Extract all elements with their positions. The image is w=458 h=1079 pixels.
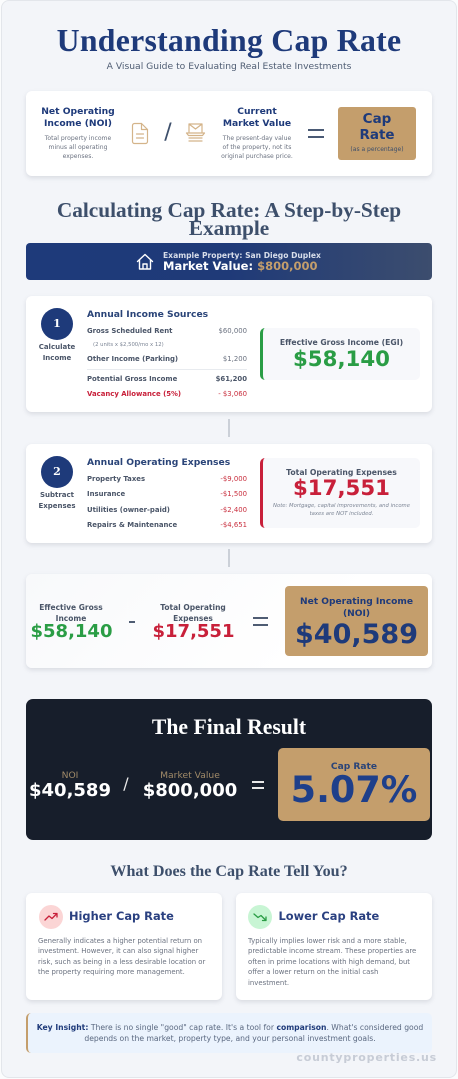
- section heading: step by step: Calculating Cap Rate: A Step-by-Step: [57, 198, 401, 222]
- expenses note: taxes are NOT included.: [310, 511, 373, 517]
- NOI result label: (NOI): [343, 609, 370, 619]
- row: utilities: -$2,400: [220, 506, 247, 514]
- market value heading: [223, 106, 291, 129]
- row: rent: Gross Scheduled Rent: [87, 327, 172, 335]
- expenses term value: $17,551: [152, 620, 234, 642]
- connector: [228, 549, 230, 567]
- row: potential gross: $61,200: [216, 375, 247, 383]
- lower heading: Lower Cap Rate: [278, 909, 379, 923]
- NOI result label: [300, 597, 413, 619]
- market value term: [221, 106, 293, 160]
- step 1 badge: [41, 308, 73, 340]
- expenses term label: Total Operating: [160, 602, 226, 612]
- market value heading: Current: [237, 106, 277, 117]
- step 2 badge: 2: [53, 465, 61, 478]
- icon: house: [136, 254, 154, 270]
- higher heading: Higher Cap Rate: [69, 909, 174, 923]
- panel: step 1 calculate income: [26, 296, 432, 412]
- icon: trending down: [248, 905, 272, 929]
- result label: Rate: [359, 127, 395, 143]
- panel: lower cap rate: [236, 893, 432, 1000]
- expenses note: Note: Mortgage, capital improvements, and income: [273, 503, 410, 509]
- row: repairs: -$4,651: [220, 520, 247, 528]
- NOI result value: $40,589: [295, 618, 418, 650]
- result label: Cap: [363, 111, 391, 127]
- market value description: of the property, not its: [223, 144, 291, 151]
- result box: cap rate: [338, 107, 416, 160]
- row: repairs: [87, 520, 247, 528]
- watermark: countyproperties.us: [296, 1051, 437, 1064]
- section heading: step by step: [57, 198, 401, 240]
- market term: [143, 770, 237, 801]
- expenses term: [152, 602, 234, 642]
- row: taxes: Property Taxes: [87, 475, 145, 483]
- higher text: Generally indicates a higher potential return on: [38, 936, 202, 944]
- icon: property: [186, 123, 206, 142]
- row: insurance: -$1,500: [220, 490, 247, 498]
- equals sign: [252, 617, 268, 626]
- row: rent: [87, 327, 247, 335]
- row: utilities: [87, 506, 247, 514]
- divide sign: /: [123, 774, 129, 793]
- row: other income: Other Income (Parking): [87, 354, 178, 362]
- callout: key insight: [26, 1013, 432, 1053]
- NOI label: NOI: [62, 770, 78, 781]
- NOI value: $40,589: [29, 780, 111, 801]
- market value description: The present-day value: [223, 135, 291, 142]
- row: potential gross: Potential Gross Income: [87, 375, 177, 383]
- panel: cap rate formula: [26, 91, 432, 176]
- NOI heading: [41, 106, 115, 129]
- income heading: Annual Income Sources: [87, 309, 208, 320]
- result box: cap rate: [278, 748, 430, 821]
- NOI description: expenses.: [63, 153, 93, 160]
- section heading: what it tells you: What Does the Cap Rate Tell You?: [110, 863, 348, 880]
- NOI heading: Income (NOI): [44, 118, 112, 129]
- step 2 badge: [41, 456, 73, 488]
- step 1 badge: 1: [53, 317, 61, 330]
- panel: step 2 subtract expenses: [26, 444, 432, 543]
- lower text: predictable income stream. These properties are: [248, 947, 416, 955]
- cap rate value: 5.07%: [291, 768, 417, 811]
- subtitle: A Visual Guide to Evaluating Real Estate Investments: [107, 60, 351, 72]
- row: other income: $1,200: [223, 354, 247, 362]
- NOI description: [44, 135, 111, 160]
- NOI description: minus all operating: [49, 144, 107, 151]
- expense rows: [87, 475, 247, 528]
- step 1 label: [39, 343, 75, 362]
- EGI term value: $58,140: [30, 620, 112, 642]
- lower text: Typically implies lower risk and a more stable,: [248, 936, 407, 944]
- row: insurance: [87, 490, 247, 498]
- NOI term: [41, 106, 115, 160]
- equals sign: [308, 129, 324, 138]
- NOI description: Total property income: [45, 135, 111, 142]
- panel: NOI calculation: [26, 574, 432, 668]
- row: utilities: Utilities (owner-paid): [87, 506, 170, 514]
- result box: NOI: [285, 586, 428, 656]
- EGI term: [30, 602, 112, 642]
- market value description: [221, 135, 293, 160]
- expenses value: $17,551: [293, 476, 390, 501]
- higher text: investment. However, it can also signal higher: [38, 947, 198, 955]
- result note: (as a percentage): [350, 146, 404, 153]
- higher text: the property requiring more management.: [38, 968, 185, 976]
- step 2 label: [38, 491, 76, 510]
- NOI result label: Net Operating Income: [300, 597, 413, 607]
- final heading: The Final Result: [152, 715, 306, 739]
- EGI term label: Income: [56, 614, 86, 622]
- lower text: often in prime locations with high demand, but: [248, 958, 410, 966]
- market value heading: Market Value: [223, 118, 291, 129]
- EGI label: Effective Gross Income (EGI): [280, 338, 403, 347]
- divide sign: /: [164, 120, 172, 145]
- step 2 label: Subtract: [40, 491, 74, 499]
- row: taxes: [87, 475, 247, 483]
- EGI term label: Effective Gross: [39, 602, 103, 612]
- insight text: [37, 1023, 423, 1043]
- row: other income: [87, 354, 247, 362]
- NOI term: [29, 770, 111, 801]
- row: vacancy: Vacancy Allowance (5%): [87, 390, 181, 398]
- income rows: [87, 327, 247, 398]
- higher text: risk, such as being in a less desirable location or: [38, 958, 205, 966]
- equals sign: [252, 780, 264, 789]
- NOI heading: Net Operating: [41, 106, 115, 117]
- lower text: offer a lower return on the initial cash: [248, 968, 378, 976]
- lower text: [248, 936, 416, 987]
- lower text: investment.: [248, 979, 289, 987]
- rent note: (2 units x $2,500/mo x 12): [93, 342, 164, 348]
- icon: trending up: [39, 905, 63, 929]
- row: rent: $60,000: [218, 327, 247, 335]
- panel: higher cap rate: [26, 893, 222, 1000]
- market label: Market Value: [160, 770, 220, 781]
- row: taxes: -$9,000: [220, 475, 247, 483]
- banner: example property: [26, 243, 432, 280]
- row: vacancy: - $3,060: [218, 390, 247, 398]
- insight text: Key Insight: There is no single "good" cap rate. It's a tool for comparison. What's considered good: [37, 1023, 423, 1032]
- section heading: step by step: Example: [189, 216, 269, 240]
- expenses heading: Annual Operating Expenses: [87, 457, 230, 468]
- step 1 label: Calculate: [39, 343, 75, 351]
- expenses term label: [160, 602, 226, 622]
- insight text: depends on the market, property type, and your personal investment goals.: [84, 1034, 376, 1043]
- row: insurance: Insurance: [87, 490, 125, 498]
- minus sign: [129, 621, 135, 623]
- market value description: original purchase price.: [221, 153, 293, 160]
- EGI value: $58,140: [293, 346, 390, 372]
- market value: $800,000: [143, 780, 237, 801]
- step 2 label: Expenses: [38, 502, 76, 510]
- callout: EGI: [260, 328, 420, 380]
- result label: [359, 111, 395, 143]
- market value: Market Value: $800,000: [163, 259, 317, 273]
- EGI term label: [39, 602, 103, 622]
- callout: total expenses: [260, 458, 420, 528]
- title: Understanding Cap Rate: [57, 23, 401, 58]
- connector: [228, 419, 230, 437]
- expenses term label: Expenses: [173, 614, 213, 622]
- higher text: [38, 936, 206, 976]
- expenses note: [273, 503, 410, 517]
- step 1 label: Income: [43, 354, 71, 362]
- row: repairs: Repairs & Maintenance: [87, 520, 177, 528]
- expenses label: Total Operating Expenses: [286, 468, 397, 477]
- row: vacancy: [87, 390, 247, 398]
- property label: Example Property: San Diego Duplex: [163, 250, 321, 260]
- cap rate label: Cap Rate: [331, 762, 377, 772]
- panel: final result: [26, 699, 432, 840]
- icon: document: [132, 122, 148, 144]
- row: potential gross: [87, 375, 247, 383]
